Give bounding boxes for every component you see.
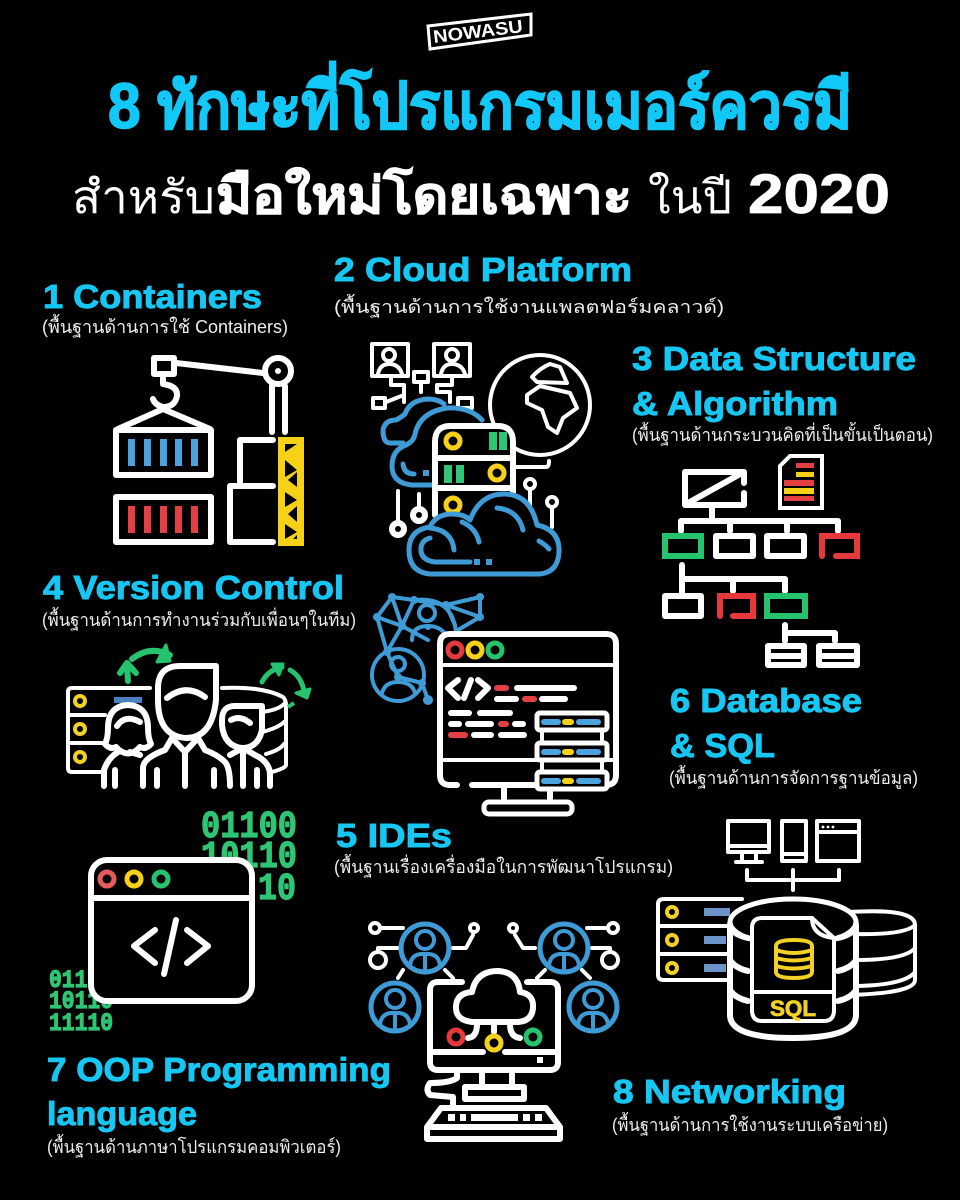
heading 7: OOP Programming language: language (47, 1095, 197, 1132)
heading 3: Data Structure and Algorithm: & Algorithm (632, 385, 838, 422)
heading 6: Database and SQL: & SQL (670, 727, 775, 764)
title: 2020 (748, 162, 890, 225)
heading 2: Cloud Platform (334, 251, 724, 318)
icon 4: team version control (68, 645, 310, 786)
title: สำหรับ (72, 171, 215, 223)
heading 6: Database and SQL: 6 Database (670, 682, 862, 719)
logo: NOWASU: NOWASU (432, 16, 524, 47)
heading 7: OOP Programming language: 7 OOP Programming (47, 1051, 391, 1088)
heading 2: Cloud Platform: (พื้นฐานด้านการใช้งานแพลตฟอร์มคลาวด์) (334, 294, 724, 318)
icon 8: database and SQL: SQL (770, 996, 816, 1021)
icon 7: code window with binary: 10110 (201, 836, 297, 879)
icon 2: cloud platform (372, 344, 590, 574)
heading 6: Database and SQL: (พื้นฐานด้านการจัดการฐานข้อมูล) (669, 765, 918, 789)
title: มือใหม่โดยเฉพาะ (216, 166, 632, 224)
icon 7: code window with binary: 10110 (49, 987, 113, 1016)
heading 1: Containers (42, 278, 288, 338)
heading 5: IDEs: (พื้นฐานเรื่องเครื่องมือในการพัฒนาโปรแกรม) (334, 854, 673, 878)
title: 8 ทักษะที่โปรแกรมเมอร์ควรมี (108, 61, 852, 142)
heading 3: Data Structure and Algorithm (632, 340, 933, 446)
logo: NOWASU (428, 14, 531, 49)
heading 1: Containers: 1 Containers (43, 278, 262, 315)
heading 5: IDEs: 5 IDEs (336, 817, 452, 854)
heading 8: Networking: 8 Networking (613, 1073, 846, 1110)
icon 3: algorithm flow chart (665, 456, 857, 665)
heading 6: Database and SQL (669, 682, 918, 789)
icon 7: code window with binary (49, 806, 297, 1038)
icon 8: database and SQL (658, 821, 915, 1038)
heading 4: Version Control: 4 Version Control (43, 569, 344, 606)
icon 1: container crane (116, 358, 304, 546)
icon 7: code window with binary: 01110 (49, 966, 113, 995)
title (72, 61, 890, 225)
heading 3: Data Structure and Algorithm: 3 Data Structure (632, 340, 916, 377)
icon 7: code window with binary: 10 (258, 868, 296, 911)
heading 2: Cloud Platform: 2 Cloud Platform (334, 251, 632, 288)
heading 7: OOP Programming language (47, 1051, 391, 1158)
heading 8: Networking (612, 1073, 888, 1136)
icon 7: code window with binary: 01100 (201, 806, 297, 849)
heading 4: Version Control: (พื้นฐานด้านการทำงานร่วมกับเพื่อนๆในทีม) (42, 607, 356, 631)
heading 3: Data Structure and Algorithm: (พื้นฐานด้านกระบวนคิดที่เป็นขั้นเป็นตอน) (632, 422, 933, 446)
heading 8: Networking: (พื้นฐานด้านการใช้งานระบบเครือข่าย) (612, 1112, 888, 1136)
icon 7: code window with binary: 11110 (49, 1009, 113, 1038)
title: ในปี (648, 171, 732, 223)
heading 7: OOP Programming language: (พื้นฐานด้านภาษาโปรแกรมคอมพิวเตอร์) (47, 1134, 341, 1158)
icon 5: IDE code monitor (372, 593, 616, 814)
heading 5: IDEs (334, 817, 673, 878)
heading 1: Containers: (พื้นฐานด้านการใช้ Containers) (42, 314, 288, 338)
heading 4: Version Control (42, 569, 356, 631)
icon 9: cloud monitor with users (370, 923, 618, 1139)
